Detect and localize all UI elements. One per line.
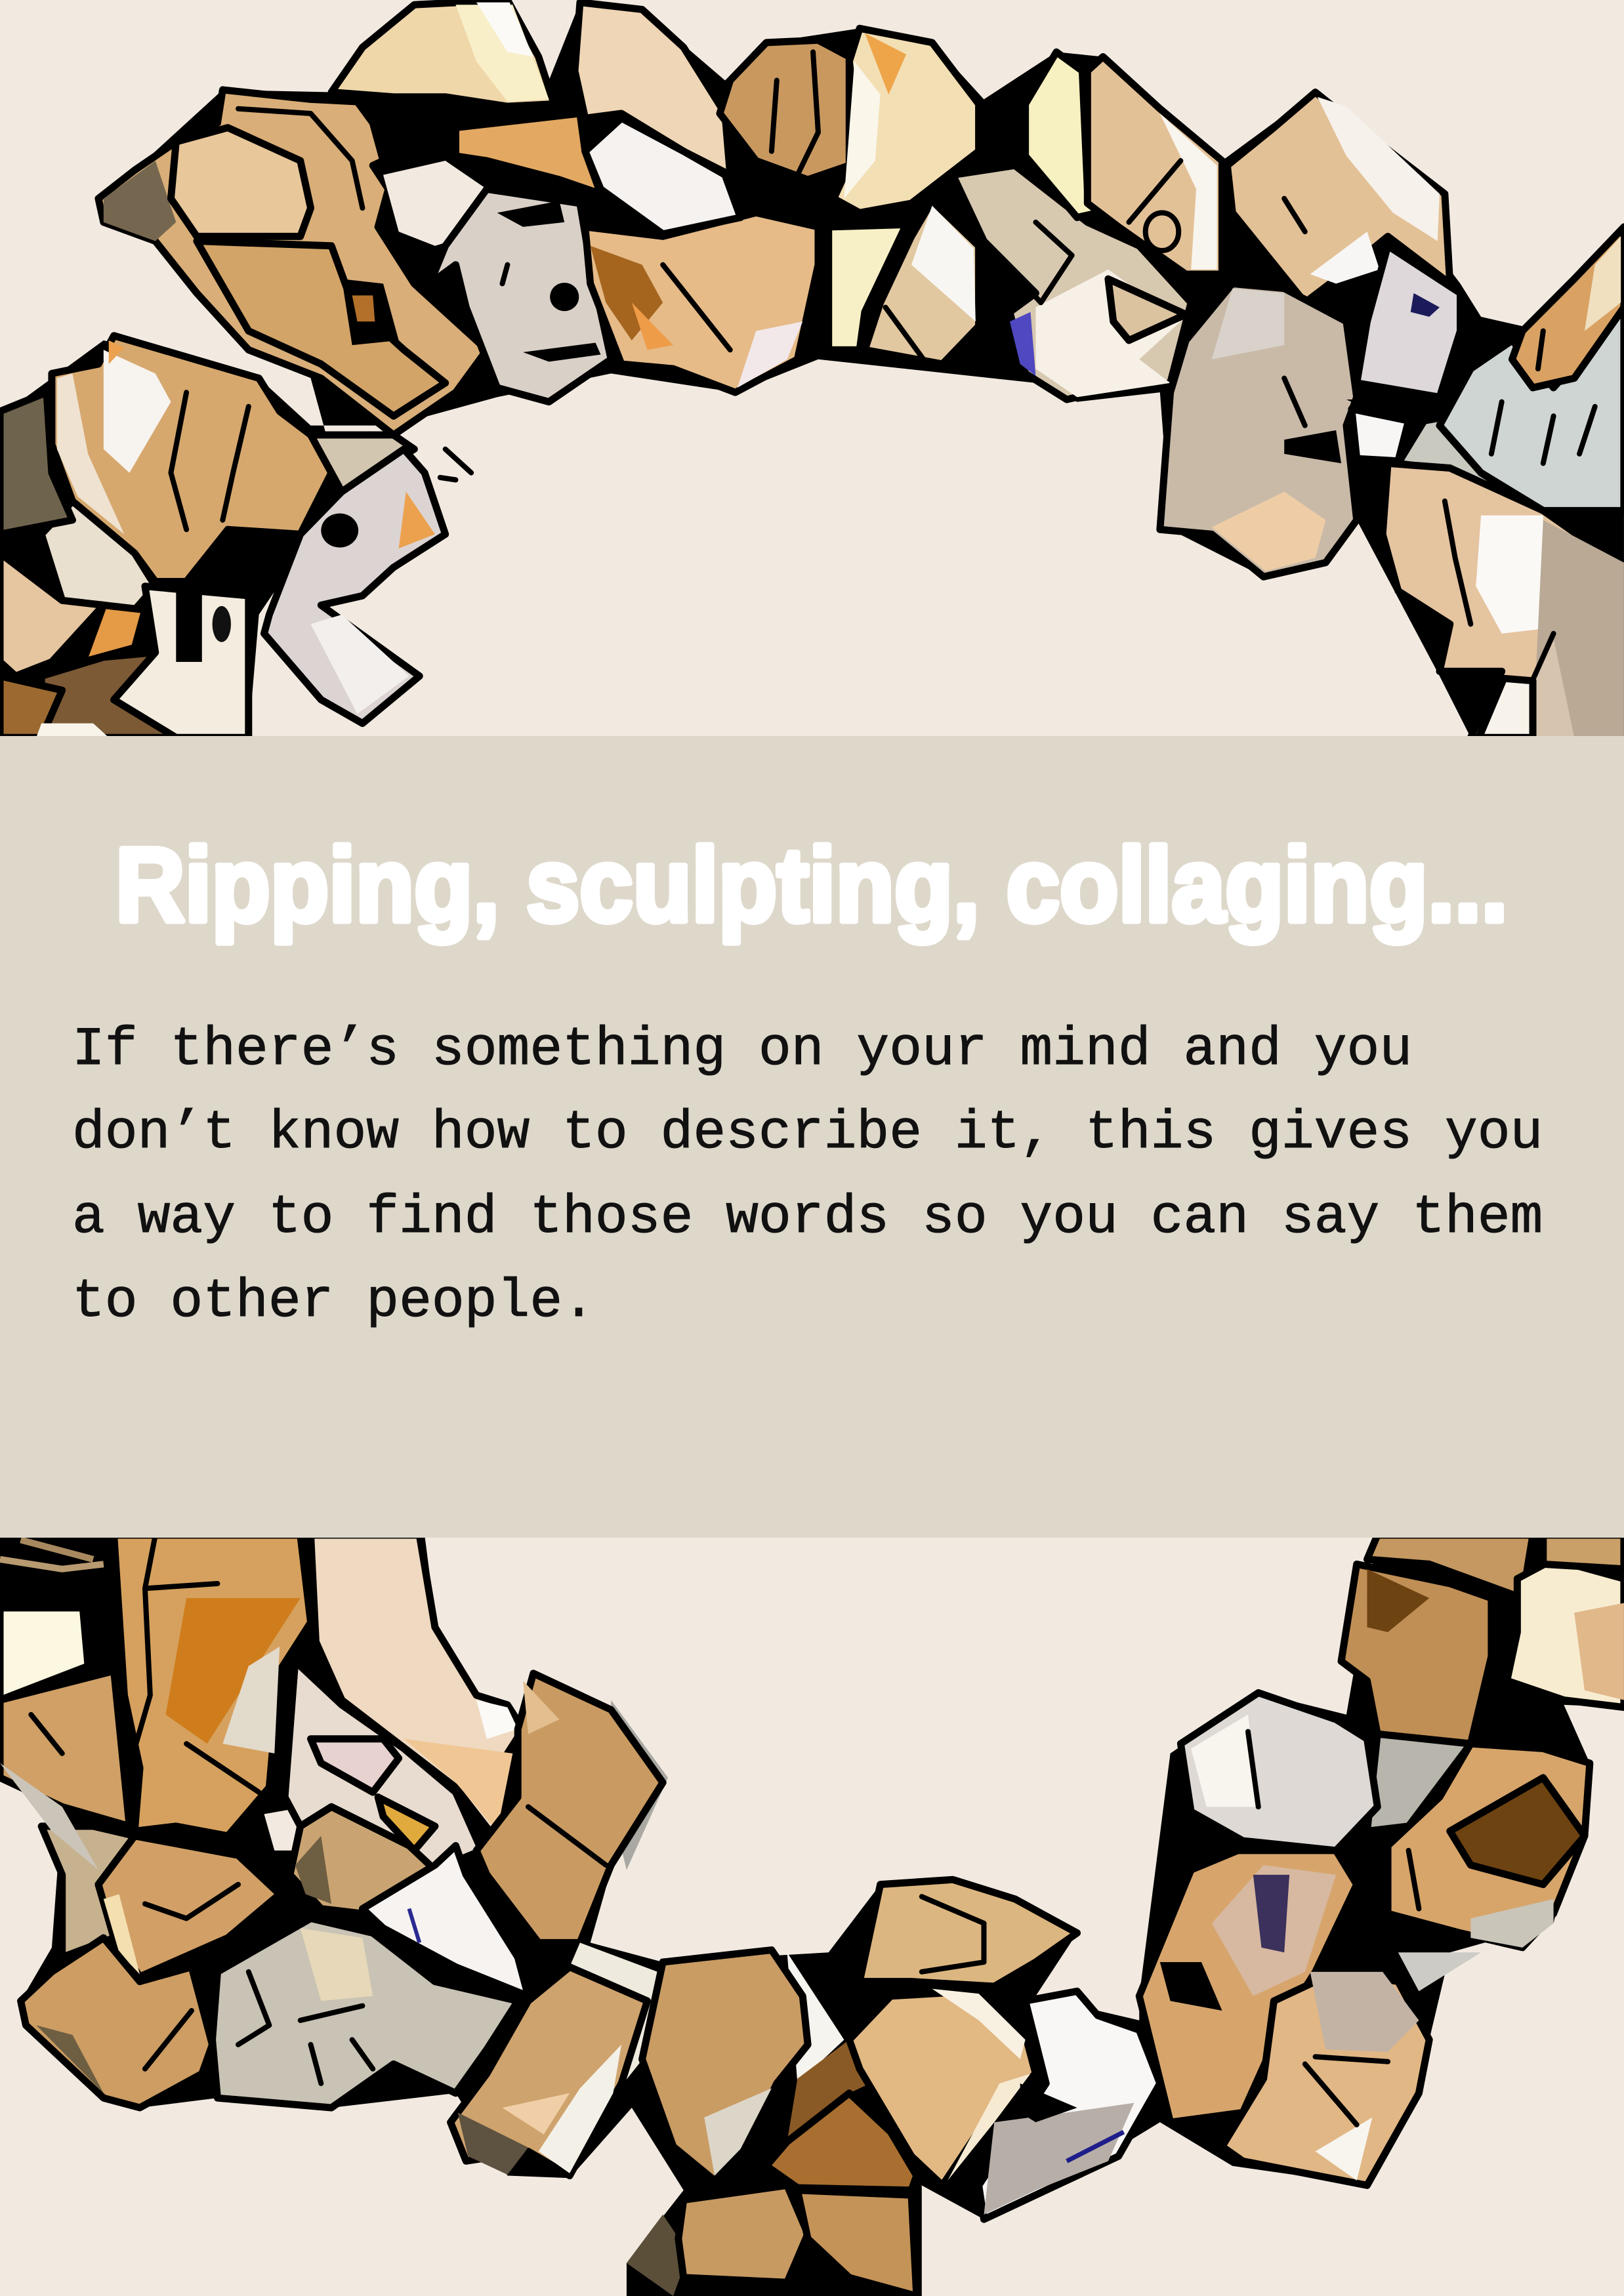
rock: small top <box>860 1879 1077 1986</box>
body text: don’t know how to describe it, this gives you <box>72 1102 1543 1164</box>
rock: brown lower fill <box>41 653 176 737</box>
rock: tan white rim <box>642 1950 844 2181</box>
rock: lower right stack <box>1383 463 1624 737</box>
rock: white left <box>0 1608 88 1700</box>
rock: big white right <box>1180 1692 1377 1851</box>
small flecks <box>440 449 471 480</box>
rock: grey column <box>1160 283 1357 577</box>
rock: yellow sliver <box>1026 52 1098 218</box>
rock: tan grey lower right <box>1222 1972 1429 2185</box>
rock: diamond <box>98 1836 280 1977</box>
rock: white column <box>114 586 249 737</box>
rock: brown striped <box>720 40 849 180</box>
small gap in the ring <box>264 1807 306 1851</box>
rock: left tan white <box>52 336 331 581</box>
rock: central <box>849 1989 1035 2185</box>
rock: top cream <box>331 0 554 106</box>
rock: edge right <box>1507 1535 1624 1708</box>
rock: pale grey <box>430 189 611 402</box>
hole in the ring <box>383 161 487 246</box>
rock: grey link to arm <box>311 435 414 492</box>
body text: to other people. <box>72 1271 595 1332</box>
body text <box>72 1019 1543 1332</box>
rock: tan white bottom left <box>451 1967 647 2176</box>
rock: tan far upper right <box>1227 92 1450 302</box>
rock: pale peach <box>311 1535 523 1841</box>
rock: lower left <box>21 1938 213 2108</box>
rock: orange bridge <box>373 109 600 194</box>
rock: upper tan with orange <box>114 1535 311 1836</box>
rock: grey fuzzy <box>213 1918 518 2108</box>
rock: tan upper right <box>1087 56 1222 274</box>
top rock collage arc <box>0 0 1624 737</box>
rock: white lilac arm <box>264 449 446 724</box>
rock: grey and white centre right <box>953 165 1191 400</box>
rock: pale yellow slab <box>829 224 906 350</box>
rock: grey fuzz right <box>1440 307 1624 510</box>
rock: left tan <box>0 1671 129 1870</box>
rock: grey filler <box>1398 416 1543 513</box>
rock: cream with orange <box>834 28 979 213</box>
panel: text band <box>0 736 1624 1538</box>
rock: brown corner <box>0 605 145 737</box>
bottom rock collage arc <box>0 1535 1624 2296</box>
rock: white shard centre <box>362 1845 528 1996</box>
body text: a way to find those words so you can say them <box>72 1187 1543 1248</box>
white sliver at panel edge <box>1479 678 1533 737</box>
rock: brown-centred right <box>1388 1744 1590 1991</box>
rock: bottom pair <box>627 2185 917 2296</box>
brown filler <box>787 2040 870 2142</box>
white rim behind tan rock <box>570 1942 657 2086</box>
rock: far right top <box>1341 1535 1533 1831</box>
rock: left under stripes <box>41 501 156 610</box>
rock: tan lower left <box>0 553 104 676</box>
rock: tall tan <box>575 3 730 175</box>
rock: lilac filler <box>285 1661 482 1870</box>
white chip <box>1352 409 1409 461</box>
rock: tan right of peach <box>476 1673 668 1942</box>
title: Ripping, sculpting, collaging... <box>115 826 1508 943</box>
rock: white shard <box>585 118 741 234</box>
rock: top left stripes <box>0 1535 114 1608</box>
rock: white grey bottom <box>979 1991 1160 2219</box>
rock: small with yellow tag <box>290 1739 435 1914</box>
rock: central orange <box>585 213 818 392</box>
rock: brown middle <box>766 2093 917 2190</box>
rock: white and tan <box>865 201 979 364</box>
body text: If there’s something on your mind and you <box>72 1019 1412 1080</box>
rock: lilac white <box>1346 246 1461 419</box>
rock: orange right edge <box>1512 227 1624 388</box>
rock: tan pink lower right <box>1139 1851 1357 2122</box>
rock: grey filler left <box>41 1826 135 1958</box>
rock: dark olive left <box>0 392 72 534</box>
rock: left large tan <box>98 90 487 435</box>
